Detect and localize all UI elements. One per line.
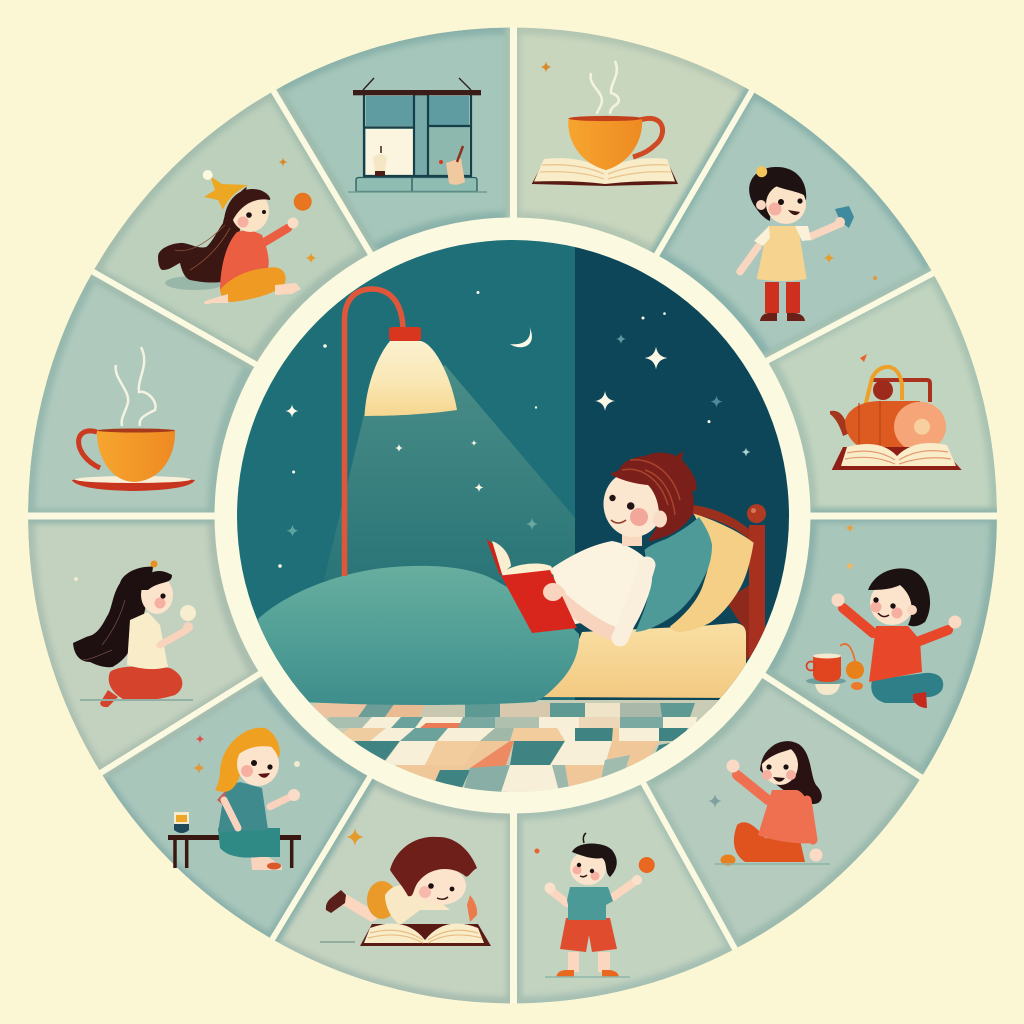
panel: child reading segment bbox=[271, 777, 514, 1004]
red book bbox=[486, 539, 577, 633]
icon: girl sitting and waving bbox=[708, 741, 830, 866]
icon: long-haired girl with cup bbox=[73, 560, 196, 707]
front pillow bbox=[636, 517, 712, 632]
bed frame bbox=[690, 504, 766, 665]
icon: girl in party hat bbox=[158, 158, 316, 304]
icon: blonde girl on bench bbox=[168, 728, 301, 870]
panel: teacup on book segment bbox=[514, 27, 752, 255]
icon: standing boy with ball bbox=[534, 833, 655, 977]
icon: boy with raised arms and tea bbox=[806, 524, 962, 708]
boy's arm bbox=[542, 565, 647, 638]
panel: girl sitting segment bbox=[643, 676, 922, 949]
panel: girl in hat segment bbox=[93, 90, 370, 363]
lamp light beam bbox=[324, 365, 575, 580]
boy's head bbox=[604, 451, 697, 546]
icon: girl holding bird bbox=[740, 166, 877, 321]
panel: teacup on saucer segment bbox=[28, 272, 253, 516]
icon: teapot on book bbox=[830, 354, 962, 470]
panel: central bedtime scene bbox=[230, 230, 800, 800]
panel: teapot segment bbox=[768, 273, 997, 516]
panel: long-haired girl segment bbox=[28, 516, 258, 774]
cream ring bbox=[214, 218, 810, 814]
moon and stars bbox=[278, 291, 750, 568]
blanket bbox=[258, 566, 579, 705]
icon: teacup on saucer bbox=[71, 347, 195, 493]
teal wall bbox=[230, 230, 575, 710]
icon: child reading on stomach bbox=[320, 828, 491, 946]
floor bbox=[308, 700, 718, 792]
icon: teacup on open book bbox=[532, 61, 678, 186]
panel: blonde girl on bench segment bbox=[99, 675, 370, 941]
dark wall bbox=[575, 230, 800, 710]
icon: window bbox=[348, 78, 487, 192]
panel: girl with bird segment bbox=[657, 90, 934, 360]
lamp bbox=[344, 289, 457, 576]
panel: boy with tea segment bbox=[765, 516, 997, 778]
mattress bbox=[540, 623, 746, 698]
back pillow bbox=[670, 514, 754, 632]
boy's sweater bbox=[552, 541, 652, 628]
panel: standing boy segment bbox=[514, 783, 735, 1004]
panel: window segment bbox=[273, 27, 514, 253]
